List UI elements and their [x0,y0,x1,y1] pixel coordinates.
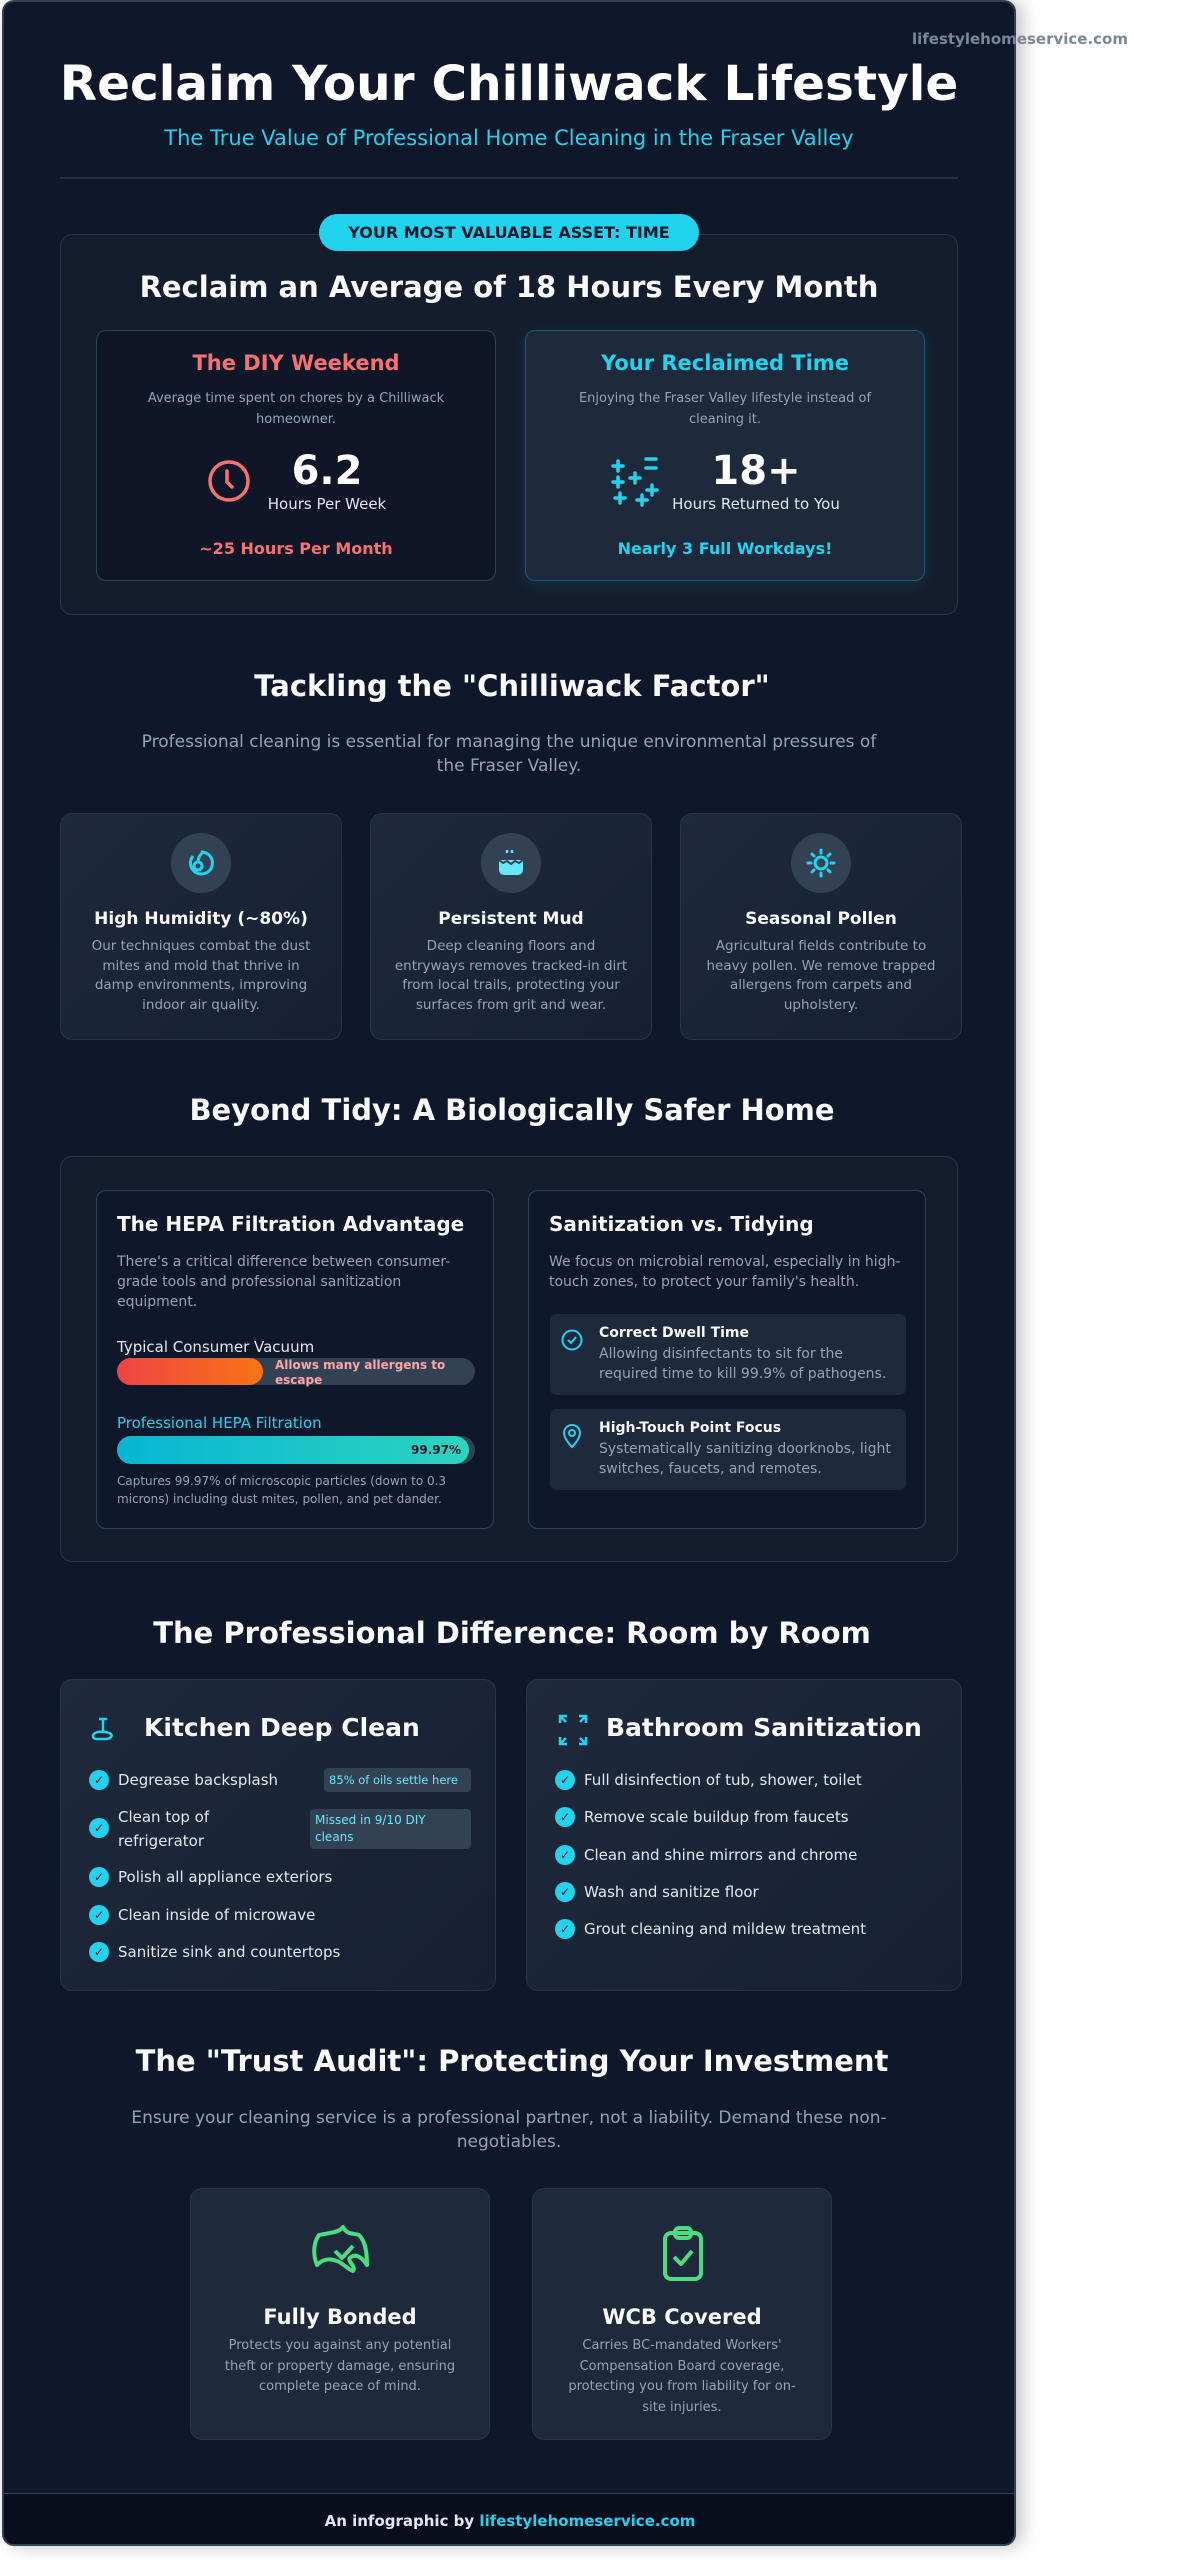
HEPA label: Professional HEPA Filtration [117,1414,322,1432]
card: mud [370,813,652,1040]
icon: location pin [563,1424,581,1448]
kitchen list: ✓ [94,1945,104,1959]
bathroom list: ✓ [560,1848,570,1862]
bathroom list: ✓ [560,1885,570,1899]
panel: time [60,234,958,615]
footer [4,2493,1016,2547]
card: sanitization [528,1190,926,1529]
bar: consumer [117,1358,475,1385]
heading: biologically safer: Beyond Tidy: A Biologically Safer Home [189,1093,835,1127]
icon: sun [791,833,851,893]
card: WCB [532,2188,832,2440]
icon: clipboard check [663,2226,703,2281]
box: dwell time: Allowing disinfectants to sit for the required time to kill 99.9% of pathogens. [599,1346,886,1382]
stat 6.2: 6.2 [292,448,362,494]
HEPA title: The HEPA Filtration Advantage [117,1212,464,1236]
heading: reclaim 18 hours: Reclaim an Average of 18 Hours Every Month [140,270,878,304]
humidity desc: Our techniques combat the dust mites and mold that thrive in damp environments, improving indoor air quality. [92,938,310,1012]
bathroom list [555,1770,866,1939]
subtitle: The True Value of Professional Home Cleaning in the Fraser Valley [164,126,854,150]
box: high-touch [550,1409,906,1490]
sub-card: DIY weekend [96,330,496,581]
kitchen list: ✓ [94,1870,104,1884]
intro: trust: Ensure your cleaning service is a professional partner, not a liability. Demand these non-negotiables. [131,2108,887,2152]
card: pollen [680,813,962,1040]
card: HEPA [96,1190,494,1529]
bathroom list: Grout cleaning and mildew treatment [584,1920,866,1938]
title: Reclaim Your Chilliwack Lifestyle [60,56,958,112]
pill badge [319,214,699,251]
bar: consumer: Allows many allergens to escape [275,1358,445,1387]
mud title: Persistent Mud [438,909,584,929]
kitchen list: Clean inside of microwave [118,1906,315,1924]
panel: safer home [60,1156,958,1562]
sub-card: reclaimed time [525,330,925,581]
DIY title: The DIY Weekend [192,351,400,375]
sanitization desc: We focus on microbial removal, especially in high-touch zones, to protect your family's health. [549,1254,901,1290]
icon: kitchen [92,1718,113,1740]
heading: room by room: The Professional Difference: Room by Room [153,1616,871,1650]
humidity title: High Humidity (~80%) [94,909,308,929]
bonded title: Fully Bonded [263,2305,417,2329]
icon: sparkles [611,457,659,507]
footer: An infographic by lifestylehomeservice.com [325,2512,695,2530]
card: bonded [190,2188,490,2440]
bathroom list: Clean and shine mirrors and chrome [584,1846,857,1864]
reclaimed desc: Enjoying the Fraser Valley lifestyle instead of cleaning it. [579,391,871,427]
bathroom title: Bathroom Sanitization [606,1713,922,1742]
kitchen list: ✓ [94,1773,104,1787]
icon: check circle [562,1330,582,1350]
box: dwell time: Correct Dwell Time [599,1325,749,1341]
stat 18+: 18+ [711,448,801,494]
icon: mud [481,833,541,893]
consumer label: Typical Consumer Vacuum [117,1338,314,1356]
kitchen list: ✓ [94,1821,104,1835]
WCB title: WCB Covered [602,2305,762,2329]
kitchen list: Degrease backsplash [118,1771,278,1789]
box: dwell time [550,1314,906,1395]
DIY footnote: ~25 Hours Per Month [199,539,393,558]
kitchen list: Clean top of refrigerator [118,1808,209,1850]
sanitization title: Sanitization vs. Tidying [549,1212,814,1236]
HEPA desc: There's a critical difference between consumer-grade tools and professional sanitization equipment. [117,1254,450,1310]
icon: humidity [171,833,231,893]
WCB desc: Carries BC-mandated Workers' Compensation Board coverage, protecting you from liability for on-site injuries. [568,2338,796,2414]
DIY desc: Average time spent on chores by a Chilliwack homeowner. [148,391,444,427]
bathroom list: ✓ [560,1922,570,1936]
sub-card: reclaimed time: Hours Returned to You [672,495,840,513]
kitchen list: Missed in 9/10 DIY cleans [315,1813,426,1844]
kitchen list: ✓ [94,1908,104,1922]
bar: HEPA [117,1436,475,1464]
heading: chilliwack factor: Tackling the "Chilliwack Factor" [254,669,770,703]
reclaimed footnote: Nearly 3 Full Workdays! [618,539,832,558]
sub-card: DIY weekend: Hours Per Week [268,495,386,513]
card: bathroom [526,1679,962,1991]
bathroom list: Wash and sanitize floor [584,1883,759,1901]
bathroom list: Remove scale buildup from faucets [584,1808,849,1826]
watermark: lifestylehomeservice.com [912,30,1128,48]
box: high-touch: Systematically sanitizing doorknobs, light switches, faucets, and remotes. [599,1441,891,1477]
kitchen list: 85% of oils settle here [329,1773,458,1787]
card: kitchen [60,1679,496,1991]
reclaimed title: Your Reclaimed Time [601,351,849,375]
icon: shield check [312,2224,369,2273]
pill badge: YOUR MOST VALUABLE ASSET: TIME [348,223,670,242]
heading: trust audit: The "Trust Audit": Protecting Your Investment [136,2044,888,2078]
pollen title: Seasonal Pollen [745,909,897,929]
card: humidity [60,813,342,1040]
icon: clock [208,460,250,502]
icon: expand arrows [558,1714,588,1746]
kitchen list [89,1768,471,1962]
bathroom list: Full disinfection of tub, shower, toilet [584,1771,862,1789]
intro text: Professional cleaning is essential for managing the unique environmental pressures of the Fraser Valley. [142,732,876,776]
bathroom list: ✓ [560,1773,570,1787]
HEPA caption: Captures 99.97% of microscopic particles (down to 0.3 microns) including dust mites, pollen, and pet dander. [117,1474,446,1506]
bonded desc: Protects you against any potential theft or property damage, ensuring complete peace of mind. [225,2338,455,2394]
box: high-touch: High-Touch Point Focus [599,1420,781,1436]
kitchen title: Kitchen Deep Clean [144,1713,420,1742]
bathroom list: ✓ [560,1810,570,1824]
kitchen list: Polish all appliance exteriors [118,1868,332,1886]
bar: HEPA: 99.97% [411,1443,461,1457]
pollen desc: Agricultural fields contribute to heavy pollen. We remove trapped allergens from carpets and upholstery. [706,938,936,1012]
kitchen list: Sanitize sink and countertops [118,1943,340,1961]
mud desc: Deep cleaning floors and entryways removes tracked-in dirt from local trails, protecting your surfaces from grit and wear. [395,938,627,1012]
